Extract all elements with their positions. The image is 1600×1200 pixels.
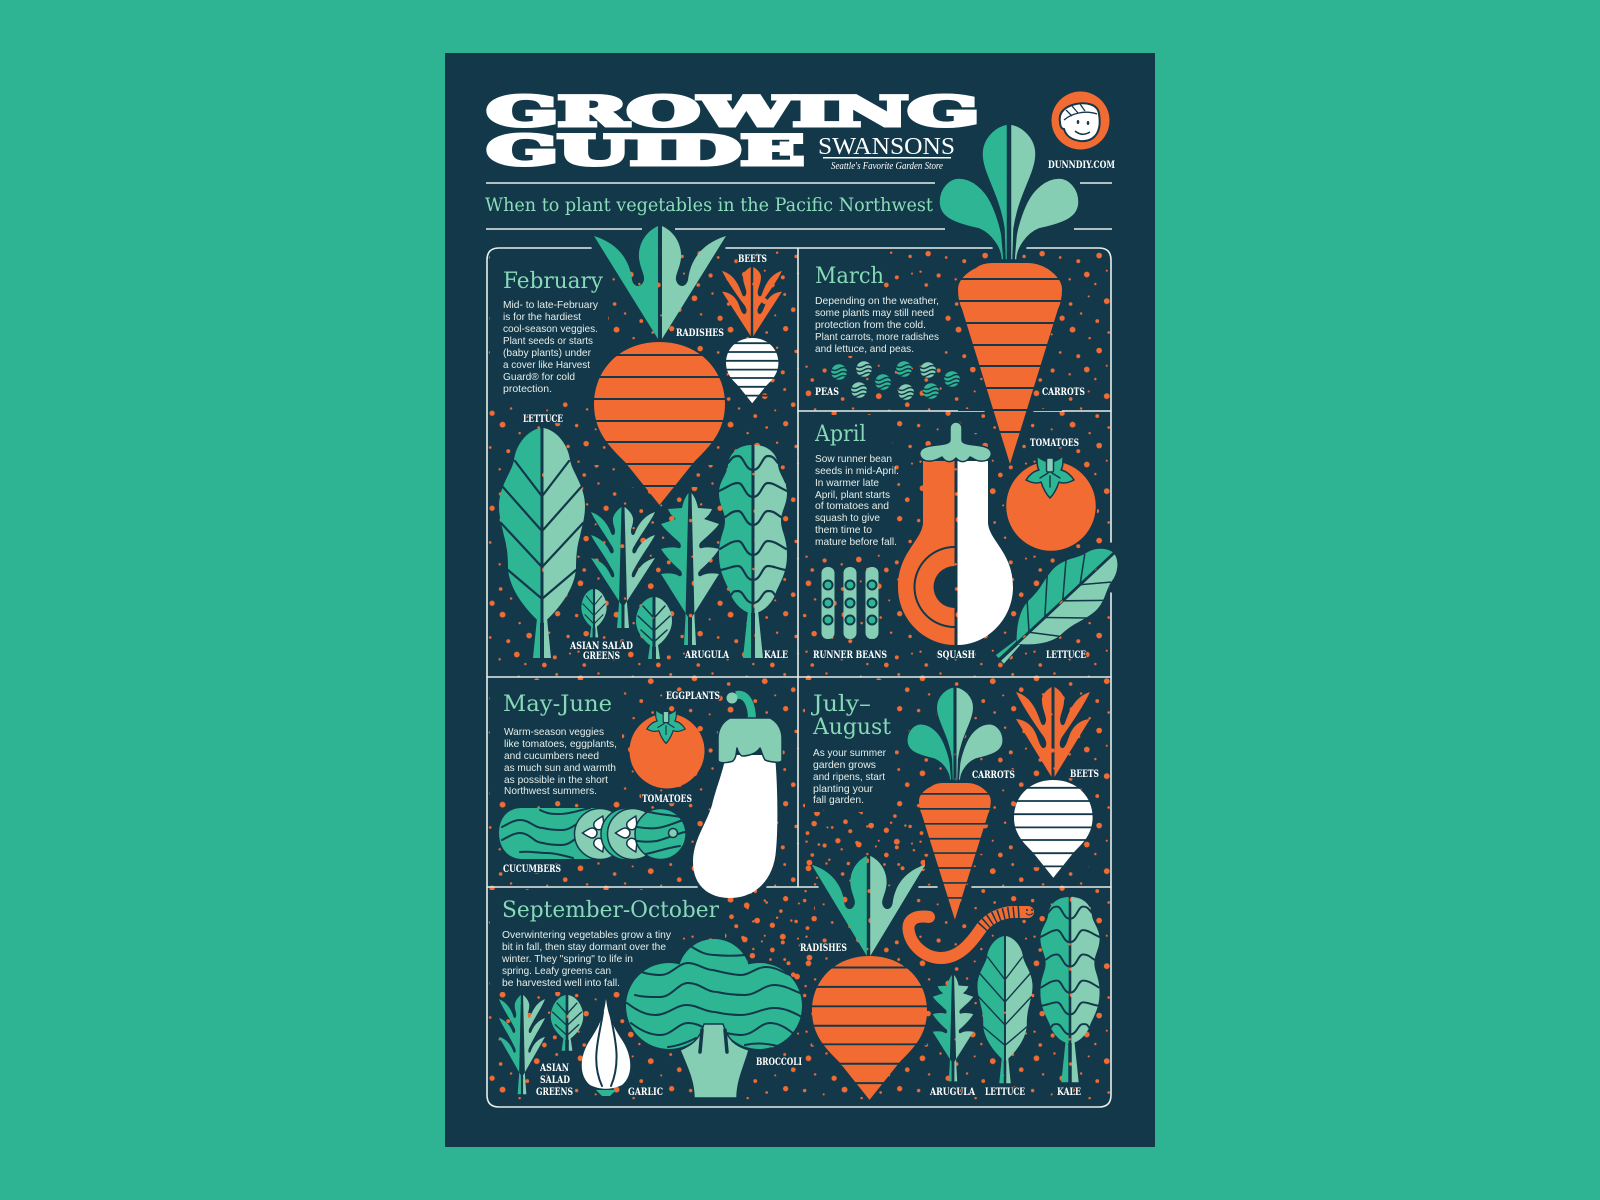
asian salad greens	[591, 507, 655, 628]
panel: April	[813, 421, 1135, 682]
heading: May-June: May-June	[503, 691, 612, 717]
text: July-August: fall garden.	[813, 794, 864, 806]
text: July-August	[813, 747, 886, 806]
text: May-June: as much sun and warmth	[504, 762, 616, 774]
text: February: Mid- to late-February	[503, 299, 599, 311]
big radish root	[594, 342, 725, 505]
text: May-June: like tomatoes, eggplants,	[504, 738, 617, 750]
logo badge	[1052, 92, 1110, 150]
labels: SQUASH	[937, 649, 975, 661]
text: February: Plant seeds or starts	[503, 335, 593, 347]
labels: SALAD	[540, 1074, 570, 1086]
text: April: seeds in mid-April.	[815, 465, 899, 477]
title	[487, 89, 979, 175]
broccoli	[626, 939, 802, 1098]
text: September-October	[501, 929, 672, 989]
heading: March: March	[815, 263, 884, 289]
small leaf	[581, 589, 607, 637]
panel: July-August	[811, 687, 1099, 920]
header	[485, 89, 1115, 229]
labels	[813, 437, 1086, 661]
website: DUNNDIY.COM	[1048, 160, 1115, 171]
labels: ASIAN	[539, 1062, 569, 1074]
panel: September-October	[499, 856, 1100, 1100]
arugula	[933, 975, 973, 1081]
text: April	[815, 453, 899, 548]
labels	[815, 386, 1085, 398]
heading: July-August	[811, 691, 891, 740]
text: April: them time to	[815, 524, 872, 536]
labels: EGGPLANTS	[666, 690, 720, 702]
labels: RUNNER BEANS	[813, 649, 887, 661]
lettuce	[977, 936, 1033, 1083]
text: September-October: be harvested well into fall.	[502, 977, 620, 989]
lettuce leaf	[979, 531, 1135, 682]
labels: LETTUCE	[985, 1086, 1025, 1098]
eggplant	[693, 692, 782, 898]
title: GROWING	[487, 89, 979, 136]
sponsor logo: Swansons: SWANSONS	[818, 134, 955, 160]
labels: LETTUCE	[523, 413, 563, 425]
text: April: mature before fall.	[815, 536, 897, 548]
text: April: of tomatoes and	[815, 500, 889, 512]
worm	[908, 909, 1033, 958]
labels: TOMATOES	[1030, 437, 1079, 449]
text: July-August: and ripens, start	[813, 771, 885, 783]
heading: February: February	[503, 268, 603, 294]
text: July-August: As your summer	[813, 747, 886, 759]
radish top	[594, 226, 726, 339]
panel: May-June	[499, 690, 782, 898]
labels: KALE	[1057, 1086, 1081, 1098]
carrot	[907, 687, 1003, 920]
text: February: a cover like Harvest	[503, 359, 590, 371]
text: September-October: bit in fall, then stay dormant over the	[502, 941, 666, 953]
text: April: squash to give	[815, 512, 880, 524]
labels: RADISHES	[800, 942, 847, 954]
header rules	[486, 183, 1112, 229]
text: May-June: as possible in the short	[504, 774, 608, 786]
small leaf	[551, 995, 583, 1051]
text: February: is for the hardiest	[503, 311, 581, 323]
text: April: In warmer late	[815, 477, 879, 489]
sponsor logo: Swansons: Seattle's Favorite Garden Store	[831, 161, 943, 172]
tomato	[1006, 456, 1096, 552]
labels: TOMATOES	[642, 793, 692, 805]
beets	[722, 267, 782, 403]
labels	[523, 253, 788, 662]
labels: ASIAN SALAD	[569, 640, 633, 652]
labels: BEETS	[738, 253, 767, 265]
panel: February	[499, 226, 788, 662]
labels: GREENS	[536, 1086, 573, 1098]
beet	[1014, 687, 1093, 878]
text: March	[815, 295, 939, 355]
heading: September-October: September-October	[502, 897, 719, 923]
panel frame lines	[487, 248, 1111, 1107]
text: March: protection from the cold.	[815, 319, 926, 331]
big carrot	[939, 124, 1079, 464]
cucumbers	[499, 808, 686, 860]
labels	[972, 768, 1099, 781]
text: September-October: spring. Leafy greens can	[502, 965, 611, 977]
text: May-June: Northwest summers.	[504, 785, 597, 797]
garlic	[582, 999, 630, 1096]
poster	[445, 53, 1155, 1147]
asian salad greens	[499, 995, 545, 1094]
labels: ARUGULA	[684, 649, 730, 661]
lettuce	[499, 428, 585, 658]
heading: July-August: July–	[811, 691, 871, 717]
kale	[719, 445, 787, 658]
labels	[503, 690, 720, 875]
sponsor logo: Swansons	[818, 134, 955, 172]
text: September-October: winter. They "spring" to life in	[501, 953, 633, 965]
text: March: some plants may still need	[815, 307, 934, 319]
labels: CARROTS	[1042, 386, 1085, 398]
text: February: Guard® for cold	[503, 371, 575, 383]
text: March: and lettuce, and peas.	[815, 343, 914, 355]
text: February: (baby plants) under	[503, 347, 591, 359]
text: July-August: planting your	[813, 783, 874, 795]
tomato	[630, 710, 704, 788]
panel: March	[815, 124, 1085, 464]
text: February: cool-season veggies.	[503, 323, 598, 335]
labels	[536, 942, 1081, 1098]
labels: BEETS	[1070, 768, 1099, 780]
arugula	[661, 493, 719, 645]
labels: KALE	[764, 649, 788, 661]
radish	[812, 856, 927, 1100]
speckled soil dots	[488, 249, 1111, 1106]
text: February: protection.	[503, 383, 552, 395]
subtitle: When to plant vegetables in the Pacific Northwest	[485, 194, 933, 216]
heading: July-August: August	[812, 714, 891, 740]
text: May-June: Warm-season veggies	[504, 726, 604, 738]
labels: RADISHES	[676, 327, 724, 339]
kale	[1040, 897, 1100, 1082]
labels: GREENS	[583, 650, 620, 662]
squash	[898, 422, 1013, 645]
text: February	[503, 299, 599, 395]
text: May-June: and cucumbers need	[504, 750, 599, 762]
labels: GARLIC	[628, 1086, 663, 1098]
text: May-June	[504, 726, 617, 797]
text: March: Plant carrots, more radishes	[815, 331, 939, 343]
labels: CARROTS	[972, 769, 1015, 781]
text: April: April, plant starts	[815, 489, 890, 501]
labels: PEAS	[815, 386, 839, 398]
small leaf 2	[636, 597, 672, 659]
labels: CUCUMBERS	[503, 863, 561, 875]
labels: ARUGULA	[929, 1086, 976, 1098]
text: March: Depending on the weather,	[815, 295, 939, 307]
runner beans	[822, 567, 878, 639]
text: April: Sow runner bean	[815, 453, 892, 465]
labels: LETTUCE	[1046, 649, 1086, 661]
title: GUIDE	[487, 128, 804, 175]
heading: April: April	[814, 421, 866, 447]
labels: BROCCOLI	[756, 1056, 802, 1068]
text: September-October: Overwintering vegetables grow a tiny	[502, 929, 672, 941]
text: July-August: garden grows	[813, 759, 876, 771]
peas	[831, 361, 960, 400]
